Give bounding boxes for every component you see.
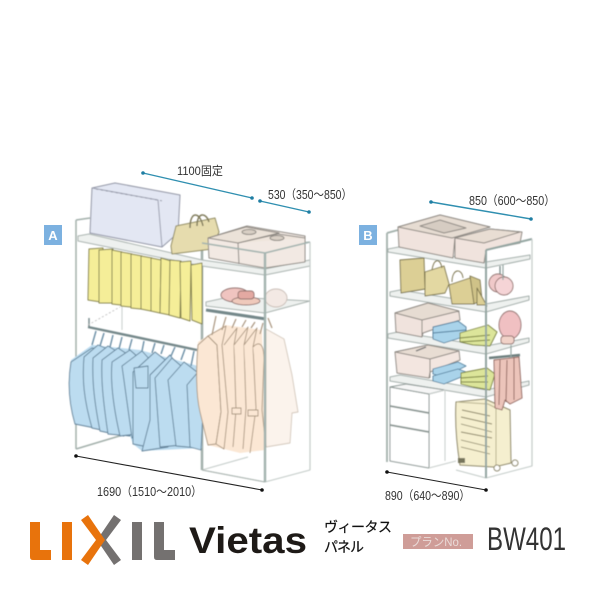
dimension: 530: 530（350～850） bbox=[268, 188, 352, 202]
badge B: B bbox=[363, 228, 373, 243]
badge B bbox=[359, 225, 377, 245]
unit B illustration bbox=[387, 215, 532, 478]
shelves: unit B bbox=[388, 247, 530, 397]
dimension: 530 bbox=[258, 188, 352, 214]
dimension: 1100 fixed: 1100固定 bbox=[177, 164, 223, 178]
product type: Vietas panel bbox=[324, 519, 392, 555]
shelf mid: unit A right bbox=[206, 297, 310, 313]
storage box: shelf 4 B bbox=[395, 345, 460, 378]
hangers: coats bbox=[212, 316, 272, 335]
dimension: 890: 890（640～890） bbox=[385, 489, 470, 503]
front frame: unit A bbox=[202, 242, 310, 482]
handbag bbox=[171, 215, 219, 254]
bags: shelf 2 B bbox=[400, 258, 487, 306]
green towels: shelf 4 B bbox=[461, 368, 495, 390]
dimension: 1690: 1690（1510～2010） bbox=[97, 485, 202, 499]
blue shirts bbox=[69, 345, 205, 451]
frame back: unit B bbox=[387, 230, 532, 478]
peach coats bbox=[197, 325, 298, 453]
dimension: 850 bbox=[429, 194, 555, 221]
yellow garments bbox=[88, 248, 202, 324]
product type: Vietas panel: パネル bbox=[324, 539, 364, 555]
product name: Vietas: Vietas bbox=[189, 520, 307, 561]
front post B bbox=[486, 239, 532, 478]
badge A bbox=[44, 225, 62, 245]
product type: Vietas panel: ヴィータス bbox=[324, 519, 392, 535]
storage case on top shelf bbox=[90, 183, 180, 247]
pans: B bbox=[489, 266, 521, 344]
dimension: 1690 bbox=[74, 454, 264, 499]
storage boxes: top B bbox=[398, 215, 522, 263]
blue towels: shelf 4 B bbox=[433, 362, 466, 384]
frame back: unit A bbox=[76, 218, 310, 482]
rod and hangers: unit A lower bbox=[88, 307, 266, 350]
storage box: shelf 3 B bbox=[395, 303, 460, 337]
plan number: BW401 bbox=[487, 521, 566, 557]
dimension: 1100 fixed bbox=[141, 164, 254, 200]
logo: LIXIL bbox=[30, 515, 175, 565]
dimension: 890 bbox=[385, 470, 488, 503]
hats bbox=[221, 288, 287, 307]
suitcase bbox=[456, 399, 518, 471]
shelf top: unit A bbox=[78, 234, 310, 275]
badge A: A bbox=[48, 228, 58, 243]
hanging pants bbox=[489, 355, 522, 410]
storage boxes on A shelf bbox=[208, 226, 305, 268]
blue towels: shelf 3 B bbox=[433, 321, 466, 343]
dimension: 850: 850（600～850） bbox=[469, 194, 555, 208]
drawer unit bbox=[390, 384, 456, 468]
hangers: blue shirts bbox=[92, 331, 194, 366]
green towels: shelf 3 B bbox=[460, 325, 497, 346]
plan number label: プランNo. bbox=[410, 535, 462, 549]
unit A illustration bbox=[69, 183, 310, 482]
